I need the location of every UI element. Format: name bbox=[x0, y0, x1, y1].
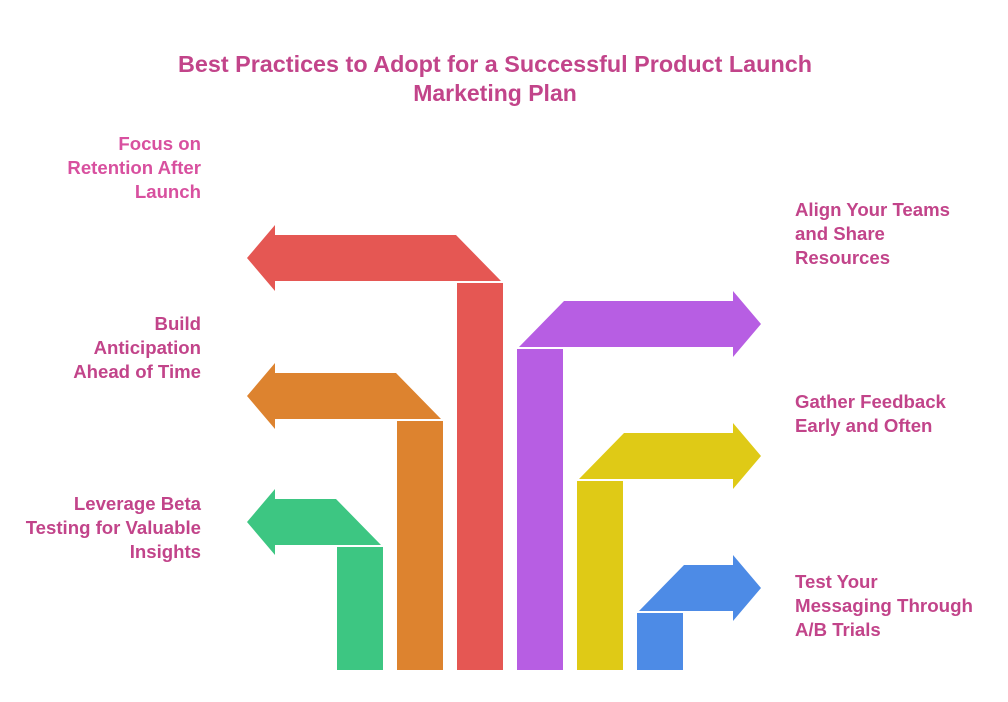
label: gather feedback bbox=[795, 391, 947, 436]
label: gather feedback: Gather Feedback bbox=[795, 391, 947, 412]
title: Best Practices to Adopt for a Successful Product Launch bbox=[178, 51, 812, 77]
arrow: orange (anticipation) bbox=[247, 363, 443, 670]
arrow: green (beta testing) bbox=[247, 489, 383, 670]
label: test messaging: Messaging Through bbox=[795, 595, 973, 616]
label: build anticipation: Build bbox=[155, 313, 201, 334]
label: test messaging: A/B Trials bbox=[795, 619, 881, 640]
label: focus on retention bbox=[67, 133, 201, 202]
arrow: purple (align teams) bbox=[517, 291, 761, 670]
label: focus on retention: Focus on bbox=[118, 133, 201, 154]
label: build anticipation bbox=[73, 313, 201, 382]
label: test messaging bbox=[795, 571, 973, 640]
label: gather feedback: Early and Often bbox=[795, 415, 932, 436]
label: align teams: Align Your Teams bbox=[795, 199, 950, 220]
label: leverage beta testing: Insights bbox=[130, 541, 201, 562]
label: focus on retention: Launch bbox=[135, 181, 201, 202]
title: Marketing Plan bbox=[413, 80, 577, 106]
label: leverage beta testing bbox=[26, 493, 202, 562]
label: leverage beta testing: Testing for Valuable bbox=[26, 517, 201, 538]
arrow: red (retention) bbox=[247, 225, 503, 670]
title bbox=[178, 51, 812, 106]
label: align teams: Resources bbox=[795, 247, 890, 268]
label: leverage beta testing: Leverage Beta bbox=[74, 493, 202, 514]
label: build anticipation: Ahead of Time bbox=[73, 361, 201, 382]
arrow: yellow (feedback) bbox=[577, 423, 761, 670]
label: focus on retention: Retention After bbox=[67, 157, 201, 178]
label: align teams: and Share bbox=[795, 223, 885, 244]
label: align teams bbox=[795, 199, 950, 268]
label: test messaging: Test Your bbox=[795, 571, 878, 592]
arrow: blue (A/B testing) bbox=[637, 555, 761, 670]
label: build anticipation: Anticipation bbox=[94, 337, 201, 358]
